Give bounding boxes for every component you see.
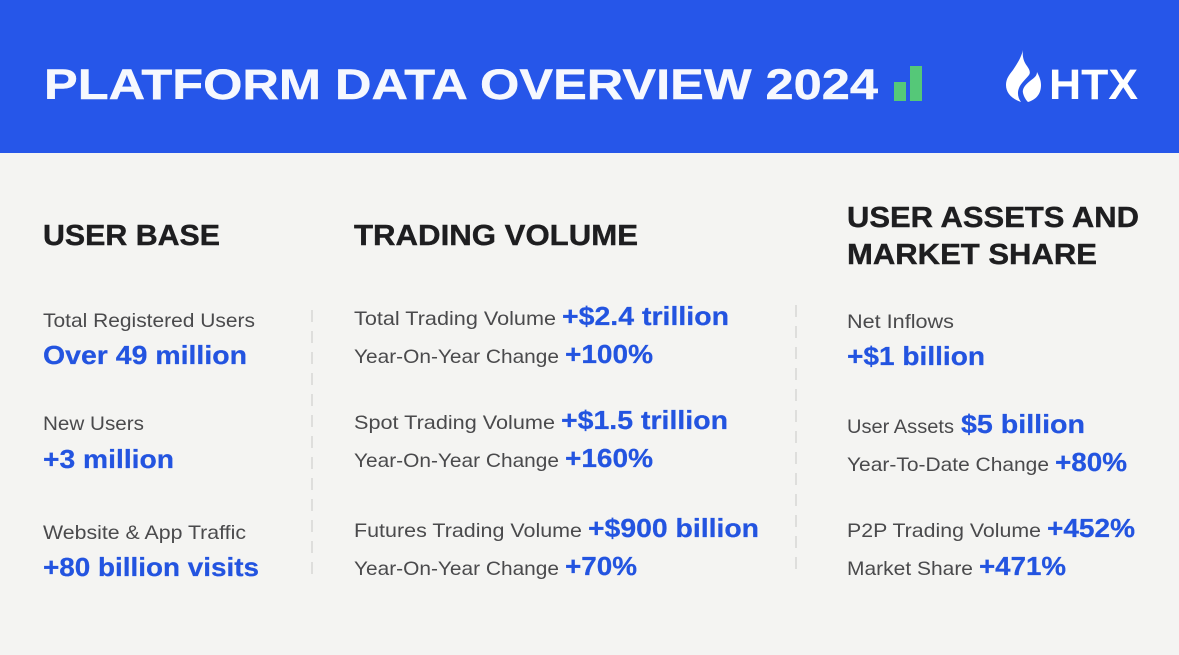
stat: user assets: User Assets bbox=[847, 416, 954, 438]
heading: trading volume: TRADING VOLUME bbox=[354, 220, 638, 252]
logo: HTX bbox=[1006, 50, 1138, 109]
stat: futures trading volume: Futures Trading Volume bbox=[354, 520, 582, 542]
stat: new users: +3 million bbox=[43, 444, 174, 474]
stat: user assets: $5 billion bbox=[961, 409, 1085, 439]
stat: user assets: +80% bbox=[1055, 447, 1127, 477]
stat: total registered users: Over 49 million bbox=[43, 340, 247, 370]
stat: total registered users bbox=[43, 310, 255, 370]
stat: p2p trading volume bbox=[847, 513, 1135, 543]
stat: total trading volume: Year-On-Year Change bbox=[354, 346, 559, 368]
stat: market share bbox=[847, 551, 1066, 581]
icon: green bar chart bbox=[894, 66, 922, 101]
stat: futures trading volume: Year-On-Year Change bbox=[354, 558, 559, 580]
stat: spot trading volume: Spot Trading Volume bbox=[354, 412, 555, 434]
stat: futures trading volume: +$900 billion bbox=[588, 513, 759, 543]
stat: website and app traffic: +80 billion visits bbox=[43, 552, 259, 582]
stat: p2p trading volume: +452% bbox=[1047, 513, 1135, 543]
stat: user assets bbox=[847, 409, 1127, 477]
stat: total trading volume bbox=[354, 301, 729, 369]
heading: user assets and market share: USER ASSETS AND bbox=[847, 202, 1139, 234]
stat: market share: +471% bbox=[979, 551, 1066, 581]
logo: HTX: HTX bbox=[1049, 61, 1138, 109]
panel: trading volume bbox=[354, 220, 759, 581]
stat: p2p trading volume: P2P Trading Volume bbox=[847, 520, 1041, 542]
stat: spot trading volume bbox=[354, 405, 728, 473]
stat: total trading volume: +100% bbox=[565, 339, 653, 369]
stat: new users: New Users bbox=[43, 413, 144, 435]
stat: futures trading volume: +70% bbox=[565, 551, 637, 581]
stat: total trading volume: Total Trading Volume bbox=[354, 308, 556, 330]
panel: user assets and market share bbox=[847, 202, 1139, 581]
stat: total trading volume: +$2.4 trillion bbox=[562, 301, 729, 331]
stat: spot trading volume: +$1.5 trillion bbox=[561, 405, 728, 435]
stat: spot trading volume: Year-On-Year Change bbox=[354, 450, 559, 472]
stat: total registered users: Total Registered Users bbox=[43, 310, 255, 332]
title: PLATFORM DATA OVERVIEW 2024 bbox=[44, 61, 878, 109]
stat: user assets: Year-To-Date Change bbox=[847, 454, 1049, 476]
stat: website and app traffic: Website & App Traffic bbox=[43, 522, 246, 544]
stat: futures trading volume bbox=[354, 513, 759, 581]
stat: net inflows: +$1 billion bbox=[847, 341, 985, 371]
stat: website and app traffic bbox=[43, 522, 259, 582]
panel: user base bbox=[43, 220, 259, 582]
stat: net inflows: Net Inflows bbox=[847, 311, 954, 333]
heading: user assets and market share bbox=[847, 202, 1139, 271]
header banner bbox=[0, 0, 1179, 153]
stat: market share: Market Share bbox=[847, 558, 973, 580]
heading: user assets and market share: MARKET SHARE bbox=[847, 239, 1097, 271]
stat: new users bbox=[43, 413, 174, 474]
stat: spot trading volume: +160% bbox=[565, 443, 653, 473]
heading: user base: USER BASE bbox=[43, 220, 220, 252]
stat: net inflows bbox=[847, 311, 985, 371]
